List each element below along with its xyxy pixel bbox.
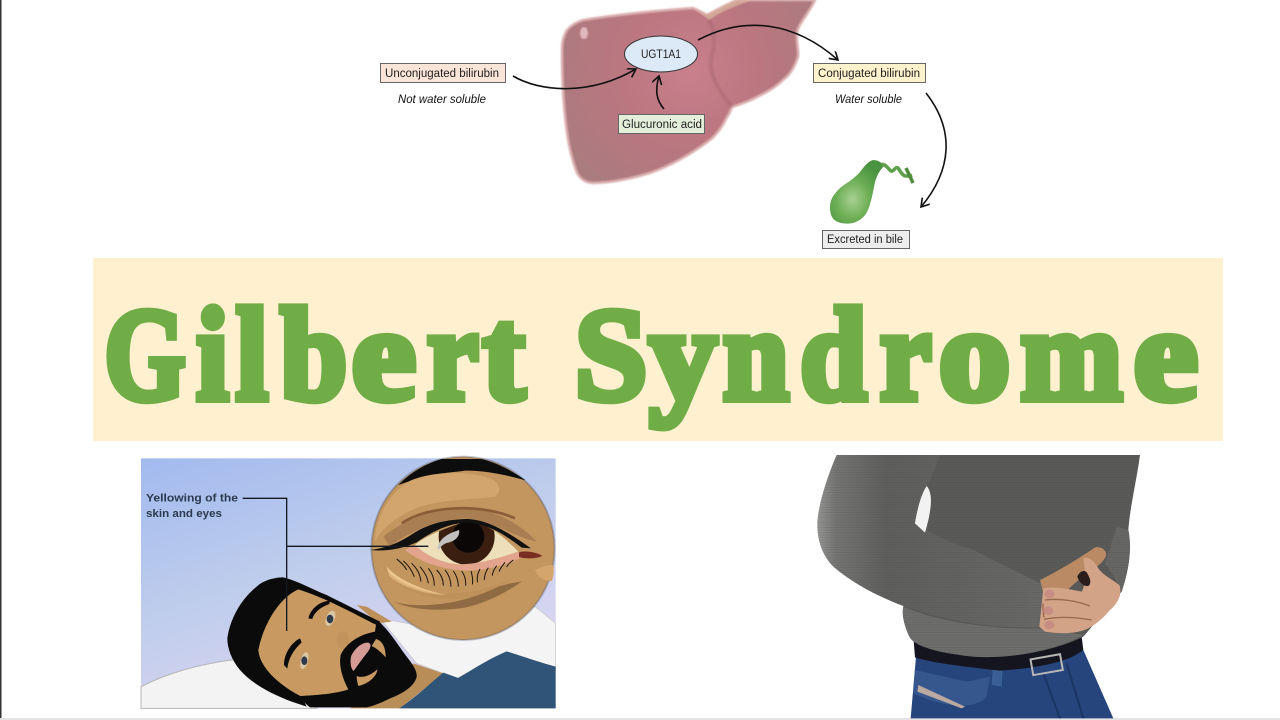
title: d <box>800 281 867 428</box>
nose shade <box>337 631 349 649</box>
belt <box>913 637 1083 675</box>
title: t <box>483 281 525 428</box>
sweater knit <box>817 455 1140 657</box>
front hand <box>1039 558 1120 633</box>
far sleeve <box>1105 527 1130 592</box>
lip-side skin <box>372 639 386 657</box>
title banner <box>93 258 1223 441</box>
page edge line <box>0 0 2 720</box>
title: l <box>236 281 268 428</box>
upper lashes <box>370 519 531 550</box>
cheek highlight <box>387 567 447 595</box>
lid crease <box>402 508 515 523</box>
title: n <box>723 281 789 428</box>
eye white <box>415 522 518 564</box>
lower lid <box>405 545 523 571</box>
elbow gap <box>915 486 931 533</box>
close-up forehead highlight <box>375 473 499 542</box>
title: r <box>880 281 931 428</box>
eyebrows <box>308 601 330 619</box>
background <box>141 458 556 708</box>
box: unconjugated bilirubin <box>380 64 506 82</box>
title: i <box>196 281 228 428</box>
mouth <box>351 643 371 671</box>
box: unconjugated bilirubin: Unconjugated bilirubin <box>385 68 499 80</box>
title: e <box>1134 281 1198 428</box>
torso <box>903 455 1140 657</box>
right cheek highlight <box>535 565 554 581</box>
box: excreted in bile <box>822 230 910 248</box>
callout: yellowing of the skin and eyes: Yellowing of the <box>146 493 238 505</box>
finger lines <box>1043 599 1092 620</box>
box: glucuronic acid: Glucuronic acid <box>622 119 702 131</box>
box: conjugated bilirubin <box>814 64 926 82</box>
panel: bilirubin conjugation diagram <box>380 0 946 248</box>
box: conjugated bilirubin: Conjugated bilirubin <box>818 68 920 80</box>
box: excreted in bile: Excreted in bile <box>827 234 903 246</box>
jeans <box>911 650 1113 718</box>
close-up hair <box>398 459 526 485</box>
title: r <box>427 281 478 428</box>
lower sweater band <box>903 607 1083 657</box>
man's head <box>227 577 417 707</box>
back hand <box>1040 547 1106 593</box>
lower lashes <box>397 559 513 587</box>
arrow: glucuronic acid to UGT1A1 <box>657 76 664 109</box>
corner of eye <box>519 552 542 558</box>
ear <box>357 605 392 623</box>
title: b <box>280 281 347 428</box>
hands <box>1039 547 1120 633</box>
title: y <box>649 281 717 428</box>
eyelid fold <box>383 508 537 547</box>
title: o <box>939 281 1010 428</box>
illustration: liver <box>562 0 815 183</box>
arrow: UGT1A1 to conjugated bilirubin <box>698 25 838 60</box>
face eyes <box>323 609 337 627</box>
illustration: gallbladder <box>830 160 913 224</box>
note: not water soluble: Not water soluble <box>398 94 486 106</box>
iris <box>438 522 495 564</box>
bottom edge line <box>0 718 1280 720</box>
title: S <box>575 281 647 428</box>
callout: yellowing of the skin and eyes <box>146 493 428 631</box>
arm <box>817 455 1048 627</box>
finger gap <box>1077 571 1090 586</box>
beard <box>300 620 417 707</box>
eye glint <box>438 530 459 550</box>
box: glucuronic acid <box>618 114 704 134</box>
callout: yellowing of the skin and eyes: skin and eyes <box>146 508 222 520</box>
arrow: unconjugated bilirubin to UGT1A1 <box>513 69 636 89</box>
note: water soluble: Water soluble <box>835 94 902 106</box>
sheets <box>380 607 556 678</box>
hair <box>227 577 380 707</box>
title: G <box>104 281 186 428</box>
photo: man holding stomach <box>817 455 1140 718</box>
under-eye bag <box>393 582 522 610</box>
pillow <box>141 659 317 708</box>
chin skin <box>357 669 377 686</box>
shirt <box>399 651 556 708</box>
fingertips <box>1044 590 1054 598</box>
arrow: conjugated bilirubin to bile <box>921 93 946 207</box>
title: e <box>352 281 416 428</box>
illustration: jaundiced man with eye close-up <box>141 457 556 708</box>
cheek shade <box>382 565 512 599</box>
enzyme: UGT1A1 <box>624 36 698 72</box>
close-up circle <box>370 457 555 640</box>
title: m <box>1020 281 1122 428</box>
enzyme: UGT1A1: UGT1A1 <box>641 49 681 61</box>
neck <box>350 663 443 708</box>
face <box>258 589 390 698</box>
